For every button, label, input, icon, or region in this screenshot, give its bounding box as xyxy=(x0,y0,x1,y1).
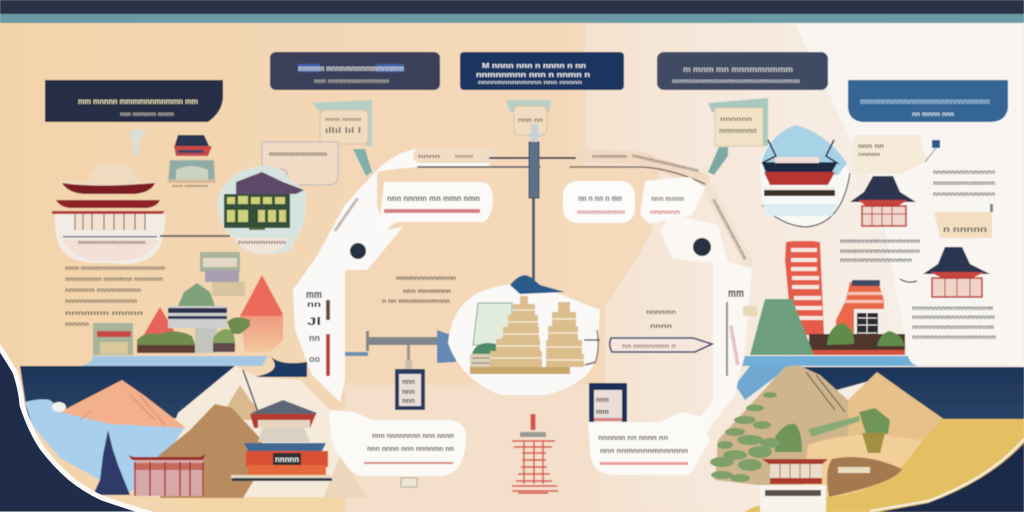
tag card 2 xyxy=(506,100,551,135)
header label 5 xyxy=(848,80,1008,122)
tag card 3 xyxy=(708,98,768,175)
right pagoda lower xyxy=(900,247,990,297)
left vertical sign xyxy=(306,289,330,376)
left text block: nnnnnnn nnnnnmnnnn xyxy=(65,288,141,294)
red gate xyxy=(127,453,206,496)
central temple circle xyxy=(448,275,600,395)
right text block mid xyxy=(840,239,920,264)
small pagoda xyxy=(168,135,216,188)
header label 4 xyxy=(657,52,828,90)
right text block bottom: nnnmnnnnmnnnnmnnnnm xyxy=(912,335,996,341)
arrow sign xyxy=(610,338,712,352)
tan label right xyxy=(934,204,993,238)
small poster right: nnn xyxy=(596,397,609,404)
tag card 3: mmnmnmn xyxy=(719,128,757,135)
bottom sand strip xyxy=(140,497,345,512)
callout upper right: nnmnnn xyxy=(650,210,680,216)
header label 4: nnnmnnnnmnnnnnmnnnnmnnnmnnnnmnnn xyxy=(672,78,800,85)
big pagoda left xyxy=(52,163,165,264)
right text block bottom: nnnmnnnnmnnnnmnnnnm xyxy=(912,325,994,331)
header label 5: nn mnnn nnn xyxy=(912,112,954,118)
left text block: nnnn nnnnmnnnnnmnnnnnmnnnnm xyxy=(65,266,165,272)
road bands xyxy=(418,155,748,262)
callout upper left xyxy=(379,182,493,233)
left gauge connector xyxy=(345,330,457,369)
road labels: nnmnnmnnmnnmnnmnnm xyxy=(710,198,747,261)
center text block xyxy=(382,275,456,305)
tan label right: n nnnnn xyxy=(943,225,987,234)
red temple lower left: nnnnn xyxy=(275,455,299,464)
left text block: nnnnnnnmnnnnnnnnn xyxy=(65,299,137,305)
header label 3: nnnnmnnnnmnnn nnn nnnnn xyxy=(478,80,582,86)
left text block: nnnnnnn nnnnn xyxy=(65,311,144,317)
right text block mid: nnnmnnnnmnnnnmnnnn xyxy=(840,239,920,245)
callout upper middle: nn n nn n mn xyxy=(578,194,622,203)
navy corner left xyxy=(0,342,152,512)
small temple bottom right xyxy=(760,459,828,512)
light dune xyxy=(323,456,367,498)
callout upper left: nnn nnnnn mn mmn nmn xyxy=(387,193,480,203)
callout lower left: nnn nnnnnnnn nnn nnnn xyxy=(372,431,454,440)
road labels: nnmnnmmn xyxy=(592,154,628,160)
trees and bridge xyxy=(710,392,890,482)
dark spire xyxy=(93,430,130,495)
header band xyxy=(0,0,1024,23)
road labels: nnmnnmnnmnnmnnmnnm xyxy=(632,153,699,174)
small poster left: nnn xyxy=(402,389,415,396)
header label 2: mmmmn mnnmmmnmmmmnnmnn xyxy=(298,63,404,73)
left text block xyxy=(65,266,165,328)
red temple lower left xyxy=(231,370,332,481)
right pagoda upper xyxy=(850,176,916,226)
brown mountain xyxy=(158,404,262,498)
tag card 1 xyxy=(312,100,372,176)
center right label: nnnnmn xyxy=(646,309,676,316)
right text block mid: nnnmnnnnmnnnnmnnnn xyxy=(840,249,920,255)
center text block: n nn mnnmnnnmnnn xyxy=(382,298,450,305)
small poster left: nnn xyxy=(402,379,415,386)
central pole and connector xyxy=(527,124,541,280)
ring road left xyxy=(293,149,490,402)
center text block: mmmnnmnnmnnn xyxy=(396,275,456,282)
right note card: nnn nn xyxy=(858,144,884,150)
note card left: mmnmnnmnmnmnnmmnnn xyxy=(269,151,327,158)
road labels: nnnn xyxy=(455,154,474,160)
rail line left xyxy=(160,235,230,237)
callout upper right xyxy=(640,177,705,224)
right text block top: nnmnnnmnnmnnnn xyxy=(933,181,995,187)
callout upper right: nnn mnnn xyxy=(651,194,684,203)
left vertical sign: Jl xyxy=(307,316,321,328)
callout lower right: nnn nnmnnnnmnnnnnn xyxy=(600,446,688,455)
right circle temple xyxy=(760,125,850,227)
small poster right: nnn xyxy=(596,409,609,416)
callout lower right xyxy=(588,412,710,475)
right hills xyxy=(715,365,1024,512)
circle temple left: nnnnmnnnn xyxy=(238,240,286,246)
right vertical sign: nnnmnnmnn xyxy=(727,325,741,366)
left town scene xyxy=(93,252,283,355)
left vertical sign: mm xyxy=(306,289,322,301)
header label 4: m mnm mn mnnmmnmmm xyxy=(683,64,793,74)
right text block top: nnmnnnmnnmnnnn xyxy=(933,170,995,176)
tag card 1: ıllıl lıl l xyxy=(325,126,361,135)
tag card 1: nnnn nnnnn xyxy=(325,117,362,123)
center right label xyxy=(646,309,676,330)
header label 3 xyxy=(460,52,624,90)
right text block bottom: nnnmnnnnmnnnnmnnnnm xyxy=(912,315,995,321)
left lake xyxy=(25,399,185,492)
ring road right xyxy=(660,217,752,440)
road labels: nnmnnmnnmnn xyxy=(333,196,361,233)
right text block top xyxy=(933,170,995,198)
header label 2 xyxy=(270,52,440,90)
center right label: nnnn xyxy=(650,323,672,330)
flag near pagoda xyxy=(131,130,147,155)
land: central pale ground xyxy=(150,366,345,497)
left text block: nnnnnn xyxy=(65,322,89,328)
right text block bottom: nnnmnnnnmnnnnmnnnnm xyxy=(912,306,993,312)
sea and coast xyxy=(20,356,1024,425)
header label 1 xyxy=(45,80,223,122)
arrow sign: nn nnmnnmn n xyxy=(622,344,676,350)
right text block bottom xyxy=(912,306,996,341)
small pagoda: nnn nnmnnn xyxy=(172,183,209,188)
left vertical sign: nn xyxy=(307,300,321,309)
header label 3: M nnnn nnn n nnnn n nn xyxy=(482,63,586,70)
header label 5: mmnmnmnmmnnmnmmnmnnnnmmmn xyxy=(860,96,990,106)
brown oval with shrine xyxy=(827,457,902,497)
header label 3: nnmnnmnn nnn n nnmn n xyxy=(476,72,590,79)
road labels xyxy=(333,153,747,261)
left text block: nnnnmnnnn nnnnmnn nnnnmnn xyxy=(65,277,163,283)
callout upper middle xyxy=(563,181,635,223)
red tower xyxy=(512,414,558,493)
right text block mid: nnnmnnnnmnnnnmnn xyxy=(840,258,912,264)
right note card: nnnnn xyxy=(858,152,880,158)
left vertical sign: oo xyxy=(309,354,320,364)
right vertical sign xyxy=(726,286,757,376)
circle temple left xyxy=(218,166,306,254)
callout upper middle: nnnnmnnnnmnn xyxy=(577,209,625,216)
big pagoda left: nnnnmnnnnmnnnnmnnn xyxy=(78,240,146,246)
header label 2: nnn nnmnnnmnnnmnnn xyxy=(314,78,389,85)
callout lower right: nnnnnn nn nnnn nn xyxy=(598,433,668,442)
right note card xyxy=(853,135,940,174)
red towers and right town xyxy=(750,241,905,355)
tag card 2: nnn nn xyxy=(518,118,543,124)
header label 1: mm mnnnn mmmmnnmnmmn mm xyxy=(78,97,198,106)
tag card 3: nnnnnn xyxy=(720,117,752,123)
small poster left: nnn xyxy=(402,398,415,405)
center text block: nnn mnnmnnn xyxy=(403,288,451,295)
left vertical sign: nn xyxy=(309,333,320,343)
salmon mountain xyxy=(52,380,186,428)
small poster right xyxy=(589,383,627,424)
header label 1: nnn nnmnnn mnnn xyxy=(120,112,174,118)
tan mountain xyxy=(225,385,268,420)
callout lower left xyxy=(330,410,466,487)
note card left xyxy=(262,142,338,185)
node dots xyxy=(346,238,711,435)
road labels: nnnn xyxy=(418,154,441,160)
right vertical sign: mm xyxy=(728,286,744,300)
right text block top: nnmnnnmnnmnnnn xyxy=(933,192,995,198)
small poster left xyxy=(395,369,425,410)
callout lower left: nnn nnnn nnn nnnnmn nn xyxy=(367,444,454,453)
